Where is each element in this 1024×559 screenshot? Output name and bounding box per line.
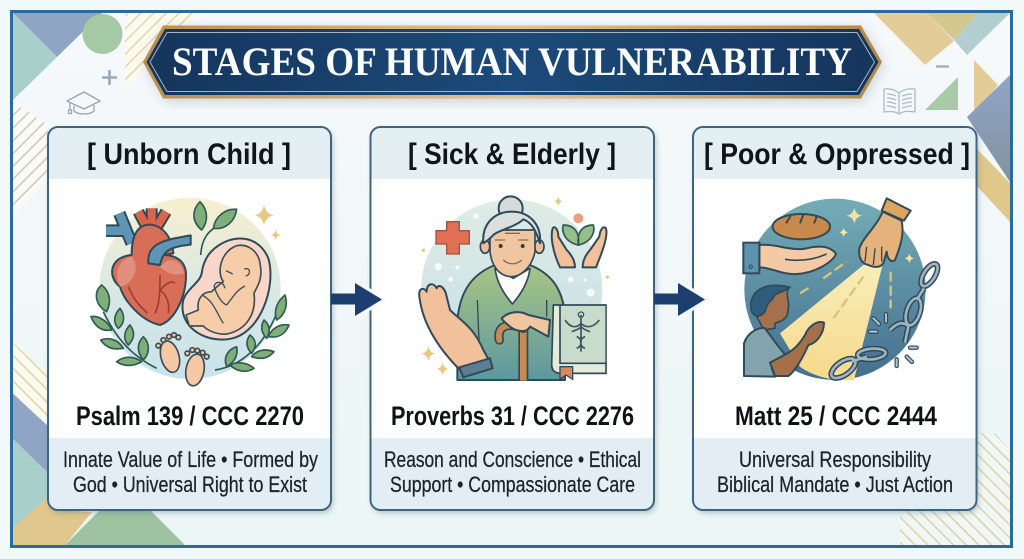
description	[63, 447, 318, 497]
description: Reason and Conscience • Ethical	[384, 447, 641, 472]
panel: sick and elderly	[370, 127, 655, 510]
arrow: unborn to sick	[331, 277, 386, 322]
heading: [ Sick & Elderly ]	[408, 138, 616, 171]
illustration: elderly woman, caring hands, cane, medical book	[419, 196, 609, 381]
description: Universal Responsibility	[739, 447, 931, 472]
description: Biblical Mandate • Just Action	[717, 472, 953, 497]
description	[717, 447, 953, 497]
icon: minus	[936, 65, 949, 68]
scripture reference: Psalm 139 / CCC 2270	[76, 401, 304, 431]
description: Innate Value of Life • Formed by	[63, 447, 318, 472]
scripture reference: Proverbs 31 / CCC 2276	[391, 401, 634, 431]
illustration: heart, fetus, feet and leaves	[91, 198, 289, 387]
icon: graduation cap	[67, 92, 100, 114]
description: Support • Compassionate Care	[390, 472, 635, 497]
icon: open book	[884, 89, 915, 114]
description	[384, 447, 641, 497]
icon: plus	[102, 70, 117, 85]
title text: STAGES OF HUMAN VULNERABILITY	[172, 39, 852, 84]
panel: poor and oppressed	[693, 127, 978, 510]
arrow: sick to poor	[654, 277, 709, 322]
title banner	[143, 26, 884, 102]
panel: unborn child	[48, 127, 331, 510]
scripture reference: Matt 25 / CCC 2444	[735, 401, 937, 431]
illustration: bread, giving hands, kneeling person, broken chain	[743, 198, 941, 382]
heading: [ Poor & Oppressed ]	[704, 138, 970, 171]
heading: [ Unborn Child ]	[87, 138, 291, 171]
description: God • Universal Right to Exist	[73, 472, 307, 497]
